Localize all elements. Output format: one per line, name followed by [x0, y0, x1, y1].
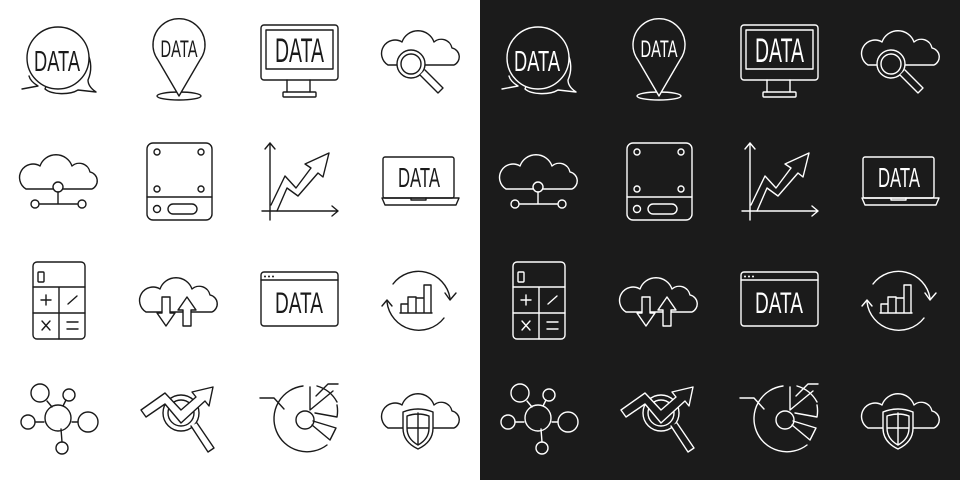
- icon: data monitor: DATA: [755, 32, 804, 70]
- icon: cloud search: [382, 31, 459, 93]
- icon: data location pin: DATA: [640, 36, 678, 63]
- icon: data monitor: DATA: [275, 32, 324, 70]
- icon: data laptop: DATA: [878, 162, 920, 193]
- icon: calculator: [513, 262, 565, 339]
- icon: data monitor: [261, 25, 338, 97]
- panel: light icon set: [20, 19, 459, 454]
- panel: dark icon set: [500, 19, 939, 454]
- icon: growth chart: [262, 143, 338, 220]
- icon: cloud network: [20, 155, 97, 208]
- icon: calculator: [33, 262, 85, 339]
- icon: cloud search: [862, 31, 939, 93]
- icon: network hub: [21, 384, 98, 454]
- icon: cloud shield: [382, 394, 459, 449]
- icon: data speech bubble: [22, 27, 96, 94]
- icon: data browser window: DATA: [755, 287, 803, 320]
- icon: refresh bar chart: [382, 271, 456, 330]
- icon: data laptop: [862, 157, 939, 205]
- icon: cloud network: [500, 155, 577, 208]
- icon: data location pin: DATA: [160, 36, 198, 63]
- icon: data speech bubble: DATA: [34, 46, 80, 78]
- icon: data browser window: [261, 272, 338, 326]
- icon: data laptop: DATA: [398, 162, 440, 193]
- icon: growth chart: [742, 143, 818, 220]
- icon: data location pin: [153, 19, 205, 100]
- icon: pie chart: [740, 384, 818, 452]
- icon: data location pin: [633, 19, 685, 100]
- icon: analytics search: [621, 387, 694, 452]
- icon: data browser window: [741, 272, 818, 326]
- icon: data browser window: DATA: [275, 287, 323, 320]
- icon: refresh bar chart: [862, 271, 936, 330]
- icon: analytics search: [141, 387, 214, 452]
- icon: data laptop: [382, 157, 459, 205]
- icon: data speech bubble: [502, 27, 576, 94]
- icon: cloud upload download: [620, 278, 697, 326]
- icon: data speech bubble: DATA: [514, 46, 560, 78]
- icon: hard drive: [627, 143, 692, 220]
- icon: hard drive: [147, 143, 212, 220]
- icon: cloud upload download: [140, 278, 217, 326]
- icon: network hub: [501, 384, 578, 454]
- icon: data monitor: [741, 25, 818, 97]
- icon: cloud shield: [862, 394, 939, 449]
- icon: pie chart: [260, 384, 338, 452]
